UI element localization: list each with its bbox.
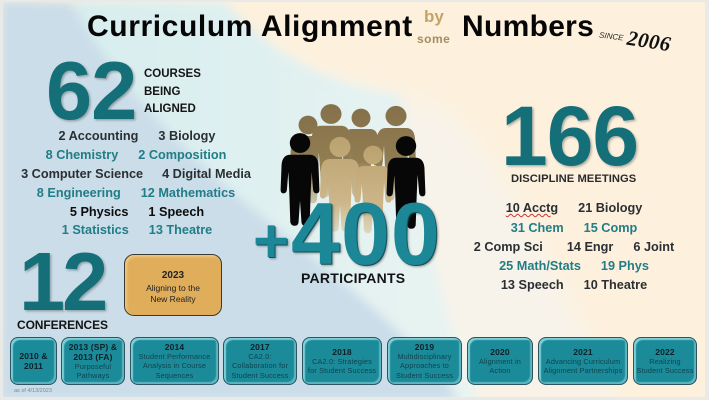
box: 2010 & 2011: 2010 & (19, 351, 48, 361)
box: 2013 (61, 337, 125, 385)
year 2006: 2006 (625, 26, 673, 56)
callout: 2023 conference (124, 254, 222, 316)
number 166: 166 (501, 89, 638, 183)
row: engineering, mathematics: 8 Engineering 12 Mathematics (37, 186, 235, 200)
box: 2021 (538, 337, 628, 385)
box: 2018: for Student Success (308, 366, 376, 375)
box: 2019: Approaches to (400, 361, 449, 370)
label conferences: CONFERENCES (17, 318, 108, 332)
box: 2014 (130, 337, 219, 385)
row: physics, speech: 5 Physics 1 Speech (70, 205, 204, 219)
icon: group of people (280, 104, 426, 234)
box: 2019: 2019 (415, 342, 434, 352)
box: 2017 (223, 337, 297, 385)
stat: +400 participants: + (253, 207, 289, 276)
box: 2014: 2014 (165, 342, 184, 352)
stat: +400 participants: 400 (291, 184, 441, 283)
number +400 (253, 184, 441, 283)
box: 2022 (633, 337, 697, 385)
box: 2014: Sequences (156, 371, 193, 380)
callout: 2023 conference: 2023 (162, 270, 184, 281)
box: 2022: Realizing (649, 357, 681, 366)
box: 2018 (302, 337, 382, 385)
stat: 166 discipline meetings (501, 89, 639, 185)
date note: as of 4/13/2023 (14, 388, 52, 394)
box: 2019 (387, 337, 462, 385)
row: chem, comp: 31 Chem 15 Comp (511, 221, 637, 235)
box: 2010 & 2011: 2011 (24, 361, 43, 371)
box: 2017: CA2.0: (248, 352, 272, 361)
box: 2022: Student Success (636, 366, 694, 375)
label participants: PARTICIPANTS (301, 270, 405, 286)
box: 2013: Purposeful (75, 362, 111, 371)
box: 2021: 2021 (573, 347, 593, 357)
label courses being aligned: BEING (144, 86, 180, 98)
row: acctg, biology: 10 Acctg 21 Biology (506, 201, 642, 215)
box: 2017: Student Success (231, 371, 288, 380)
since label: SINCE (599, 31, 624, 42)
row: computer science, digital media: 3 Computer Science 4 Digital Media (21, 167, 251, 181)
stat: 12 conferences (17, 235, 108, 332)
box: 2021: Advancing Curriculum (546, 357, 620, 366)
box: 2013: 2013 (SP) & (69, 342, 117, 352)
meeting list (474, 201, 674, 292)
row: chemistry, composition: 8 Chemistry 2 Composition (46, 148, 226, 162)
box: 2017: Collaboration for (232, 361, 288, 370)
number 12: 12 (19, 235, 105, 328)
box: 2022: 2022 (655, 347, 675, 357)
box: 2020: Alignment in (479, 357, 521, 366)
stat: 62 courses (46, 44, 201, 137)
label discipline meetings: DISCIPLINE MEETINGS (511, 173, 636, 185)
box: 2020: 2020 (490, 347, 510, 357)
row: math/stats, phys: 25 Math/Stats 19 Phys (499, 259, 649, 273)
course list (21, 129, 251, 237)
box: 2020: Action (489, 366, 511, 375)
box: 2020 (467, 337, 533, 385)
title word: Numbers: Numbers (462, 10, 594, 43)
label courses being aligned: ALIGNED (144, 103, 196, 115)
callout: 2023 conference: Aligning to the (146, 283, 200, 293)
box: 2014: Student Performance (139, 352, 210, 361)
title word: some: some (417, 32, 450, 46)
box: 2018: CA2.0: Strategies (312, 357, 372, 366)
box: 2013: 2013 (FA) (73, 352, 113, 362)
conference timeline (10, 337, 697, 385)
row: comp sci, engr, joint: 2 Comp Sci 14 Engr 6 Joint (474, 240, 674, 254)
number 62: 62 (46, 44, 136, 137)
row: accounting, biology: 2 Accounting 3 Biology (58, 129, 216, 143)
label courses being aligned (144, 68, 201, 115)
box: 2019: Student Success (396, 371, 453, 380)
box: 2014: Analysis in Course (143, 361, 206, 370)
title (87, 7, 673, 56)
title text: Curriculum Alignment: Curriculum Alignment (87, 10, 413, 43)
title word: by: by (424, 7, 444, 26)
label courses being aligned: COURSES (144, 68, 201, 80)
box: 2017: 2017 (250, 342, 270, 352)
box: 2019: Multidisciplinary (397, 352, 452, 361)
box: 2013: Pathways (77, 371, 109, 380)
box: 2010 & 2011 (10, 337, 57, 385)
callout: 2023 conference: New Reality (150, 294, 196, 304)
box: 2021: Alignment Partnerships (544, 366, 622, 375)
row: statistics, theatre: 1 Statistics 13 Theatre (62, 223, 212, 237)
box: 2018: 2018 (332, 347, 352, 357)
row: speech, theatre: 13 Speech 10 Theatre (501, 278, 647, 292)
